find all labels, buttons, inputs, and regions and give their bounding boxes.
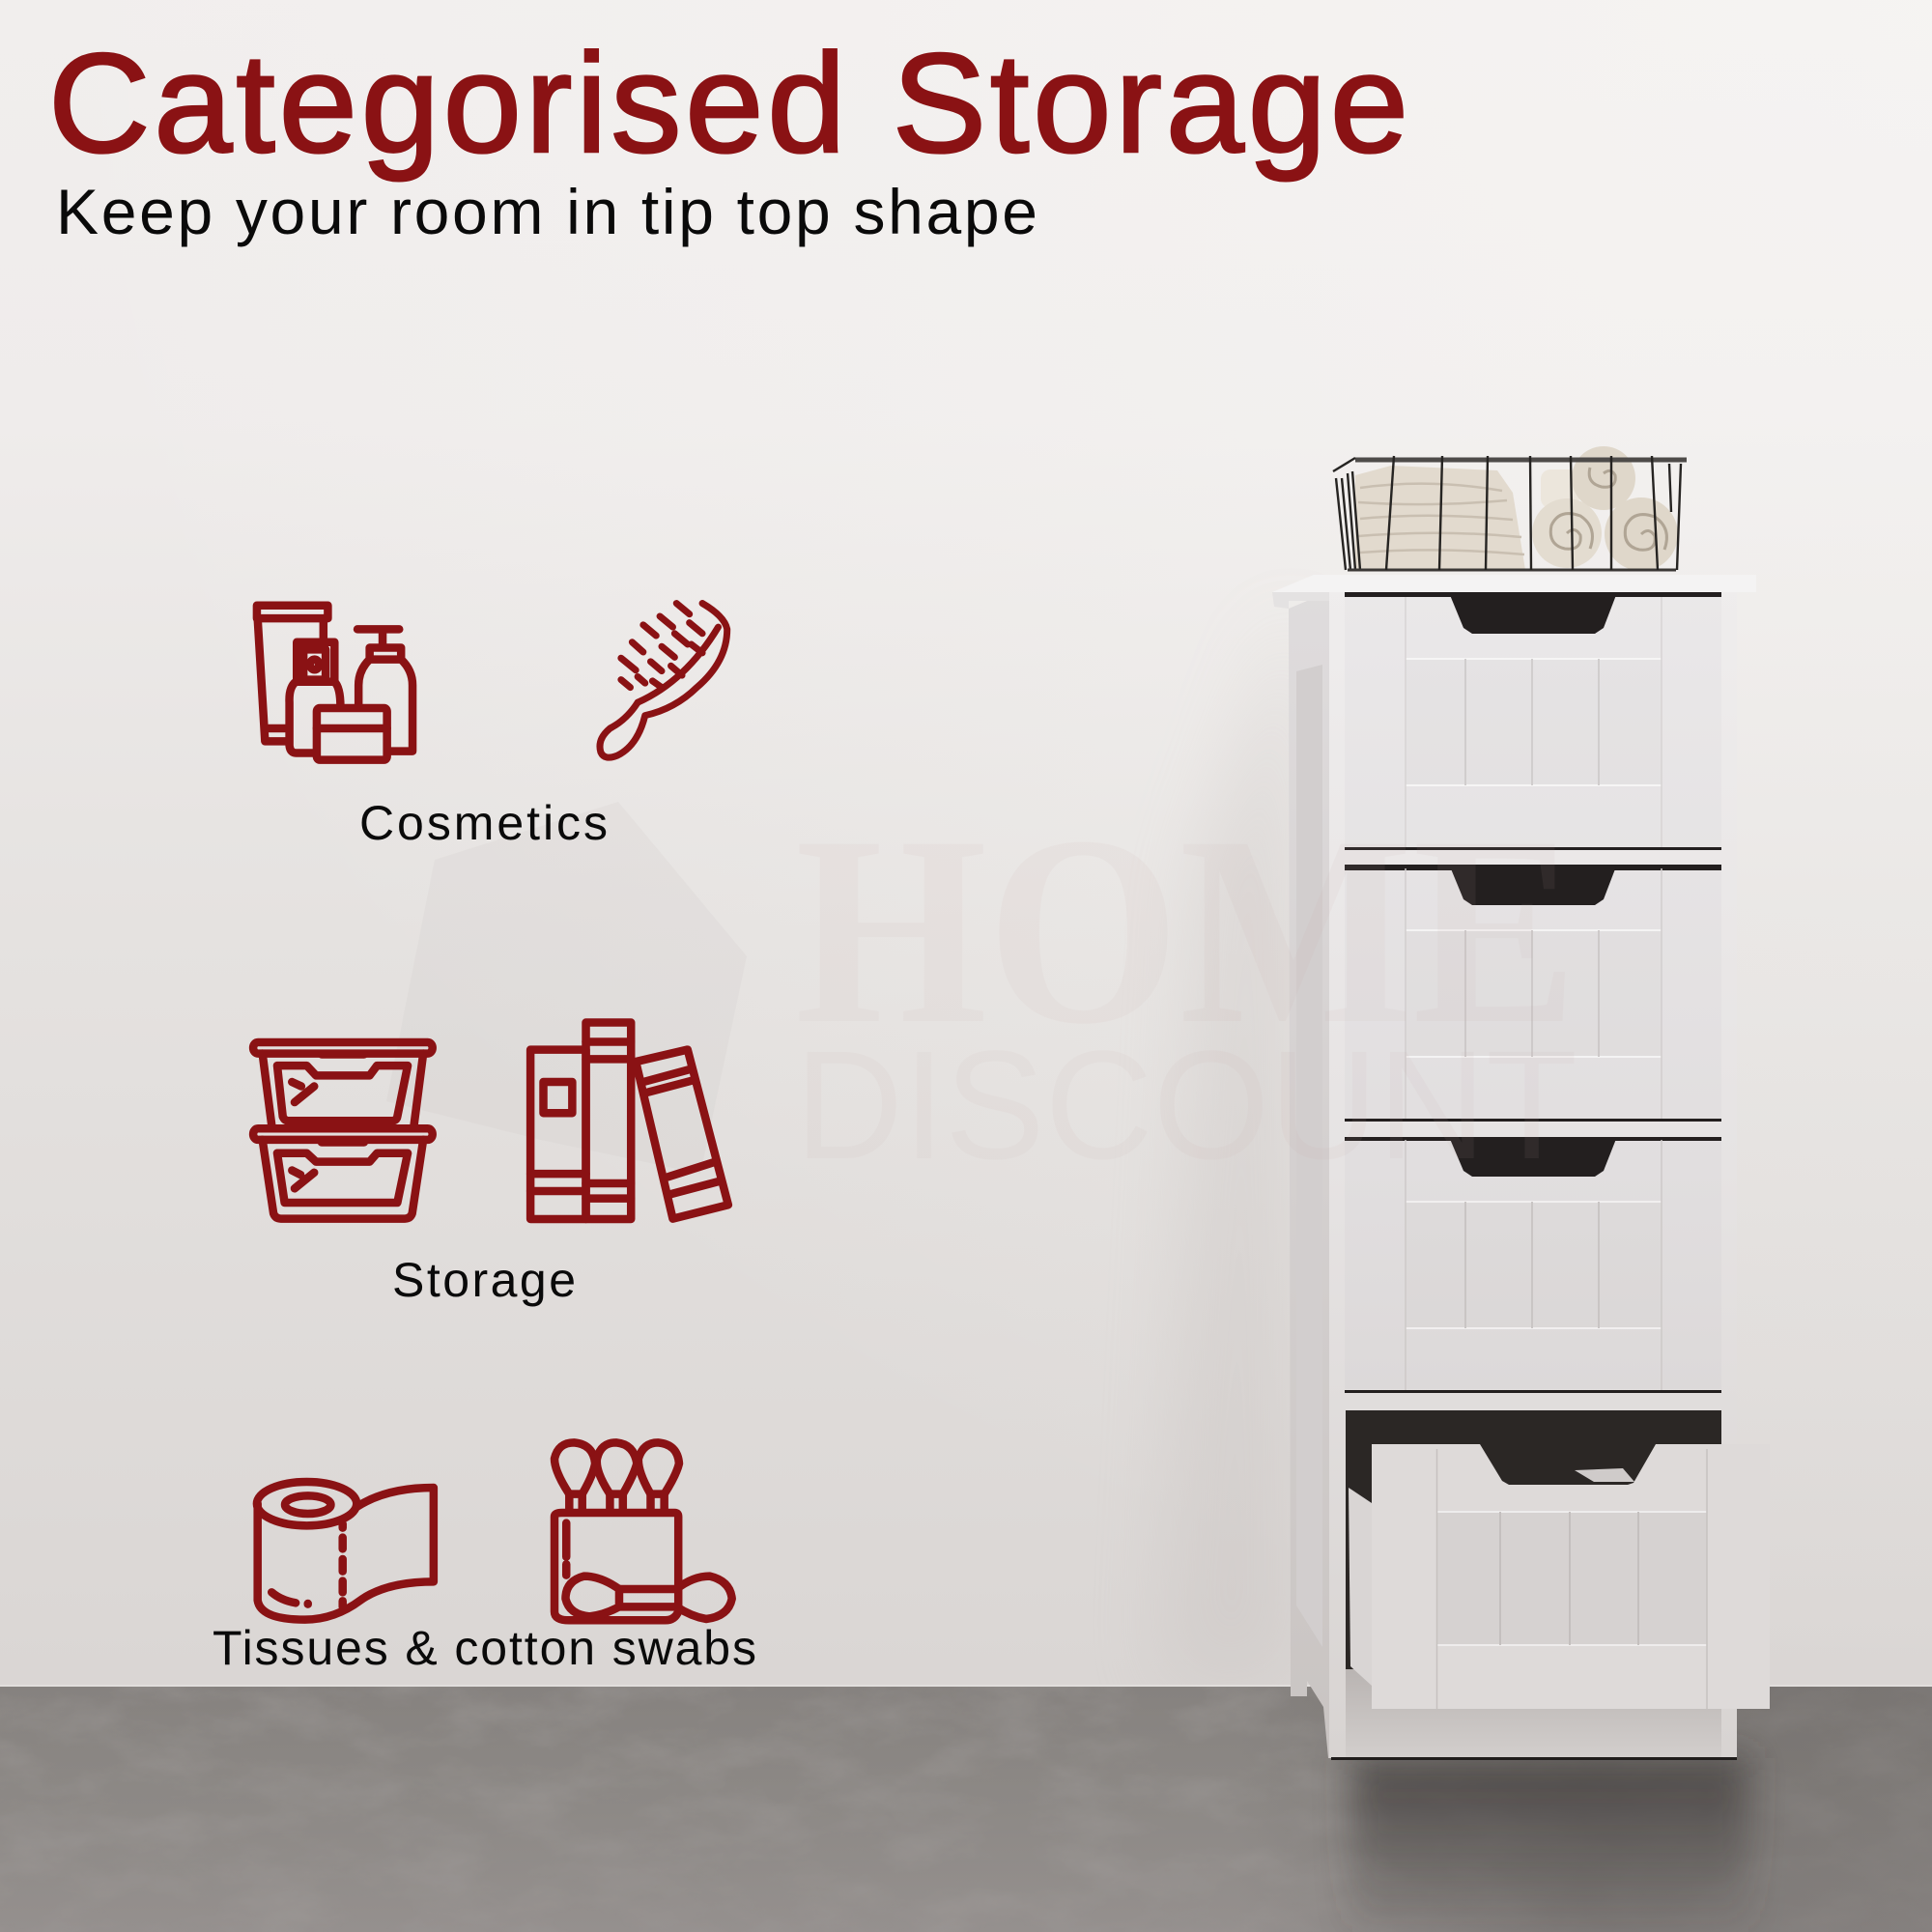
- label: Cosmetics: Cosmetics: [359, 796, 608, 850]
- drawer 2: [1345, 865, 1721, 1122]
- basket with towels: [1333, 446, 1687, 571]
- wire cage: [1333, 456, 1687, 570]
- cabinet left side panel: [1289, 591, 1330, 1758]
- icon: tissue roll: [257, 1482, 434, 1620]
- folded towels: [1355, 466, 1525, 570]
- title: Categorised Storage: [48, 24, 1408, 182]
- watermark wordmark: HOME: [795, 780, 1577, 1080]
- cabinet floor line: [1331, 1757, 1737, 1760]
- open drawer cavity: [1346, 1410, 1721, 1669]
- watermark wordmark: [795, 780, 1577, 1191]
- cabinet base: [1346, 1669, 1721, 1757]
- cabinet top board: [1272, 575, 1756, 609]
- white drawer cabinet: [1272, 575, 1770, 1760]
- icon: cotton swabs: [554, 1442, 732, 1620]
- open drawer side: [1349, 1488, 1372, 1686]
- icon: food containers: [253, 1042, 433, 1219]
- subtitle: Keep your room in tip top shape: [56, 176, 1037, 247]
- icon: hair brush: [600, 604, 727, 757]
- open drawer front: [1372, 1444, 1770, 1709]
- icon: books: [530, 1022, 728, 1219]
- watermark logo tag: [386, 802, 747, 1174]
- icon: cosmetics bottles: [257, 606, 412, 760]
- label: Tissues and cotton swabs: Tissues & cotton swabs: [213, 1621, 756, 1675]
- label: Storage: Storage: [392, 1253, 576, 1307]
- drawer 3: [1345, 1137, 1721, 1393]
- floor: [0, 1687, 1932, 1932]
- rolled towels: [1532, 446, 1678, 571]
- cabinet front frame: [1329, 591, 1737, 1758]
- watermark wordmark: DISCOUNT: [795, 1018, 1577, 1191]
- drawer 1: [1345, 592, 1721, 850]
